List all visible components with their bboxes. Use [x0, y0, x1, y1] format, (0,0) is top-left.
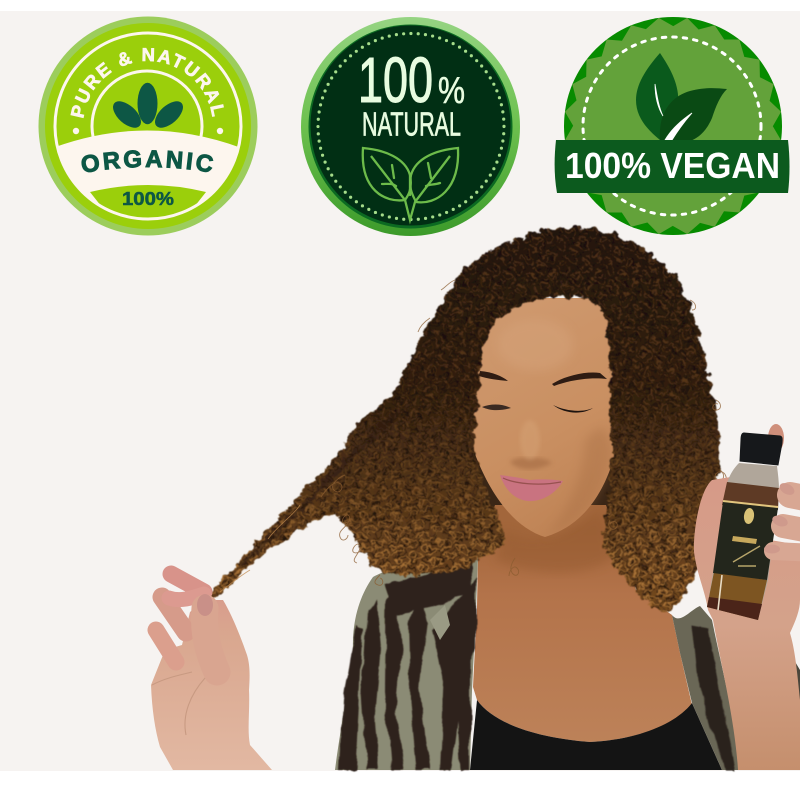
- label gold tag: [732, 536, 757, 544]
- badge number: 100: [358, 44, 433, 116]
- jacket right stripes: [692, 625, 735, 770]
- starburst seal: [551, 4, 795, 248]
- thumbnail: [197, 594, 213, 616]
- thumb: [204, 608, 217, 672]
- bottle: [707, 433, 782, 620]
- nose highlight: [520, 420, 540, 460]
- forehead highlight: [497, 319, 573, 371]
- jacket right sliver: [791, 655, 800, 705]
- hand pulling hair strand: [151, 574, 272, 770]
- badge percent sign: %: [438, 70, 465, 111]
- palm crease: [152, 672, 205, 735]
- dark strand streak: [240, 410, 400, 566]
- eyebrow right: [552, 373, 607, 386]
- fingernails: [764, 481, 796, 554]
- black top: [470, 700, 722, 770]
- jacket right: [672, 606, 742, 770]
- hair backing behind face: [468, 300, 622, 540]
- fingers: [773, 495, 800, 553]
- bottle label: [713, 502, 778, 580]
- bottle oil: [722, 482, 779, 510]
- cheek shadow: [545, 428, 612, 537]
- bottle lower oil: [707, 572, 767, 620]
- banner text: 100% VEGAN: [565, 145, 780, 186]
- palm: [151, 600, 272, 770]
- badge: 100% vegan: [551, 4, 795, 248]
- jacket left: [335, 555, 478, 770]
- jacket dark stripes: [340, 562, 476, 770]
- eye right: [553, 405, 593, 413]
- neck and chest: [473, 505, 692, 742]
- leaf highlights: [655, 84, 692, 140]
- nose shadow: [510, 457, 552, 469]
- label emblem: [743, 507, 755, 525]
- stray curls: [220, 280, 726, 592]
- label script: [733, 546, 760, 566]
- badge leaves: [108, 83, 188, 133]
- leaf back: [636, 53, 678, 140]
- leaf front: [660, 88, 727, 141]
- eye left: [482, 404, 511, 410]
- middle finger: [169, 594, 204, 600]
- label gold line: [723, 501, 778, 507]
- banner: [555, 140, 790, 193]
- badge dot right: [217, 128, 223, 134]
- badge line leaves: [363, 148, 458, 220]
- badge word natural: NATURAL: [362, 106, 461, 142]
- lips: [500, 475, 563, 501]
- badge: 100% natural: [301, 17, 520, 236]
- badge: pure and natural organic: [38, 16, 258, 236]
- badge dot left: [73, 128, 79, 134]
- neck shadow: [495, 510, 615, 572]
- badge word organic: ORGANIC: [81, 150, 214, 172]
- index finger: [171, 574, 204, 592]
- ring finger: [162, 597, 186, 632]
- badge curved heading: PURE & NATURAL: [70, 48, 224, 118]
- bottle highlight: [718, 575, 722, 610]
- hand and arm holding bottle: [694, 424, 800, 770]
- bottle cap: [740, 433, 782, 465]
- bottle sediment: [707, 597, 762, 620]
- face: [470, 298, 616, 537]
- finger behind cap: [768, 424, 784, 452]
- pinky finger: [156, 630, 176, 662]
- photo: woman with curly hair holding bottle: [151, 227, 800, 770]
- eyebrow left: [479, 371, 508, 381]
- hair: [208, 227, 720, 612]
- badge cream band: [58, 130, 238, 204]
- badge 100 percent: 100%: [122, 188, 174, 209]
- jacket collar: [430, 605, 450, 640]
